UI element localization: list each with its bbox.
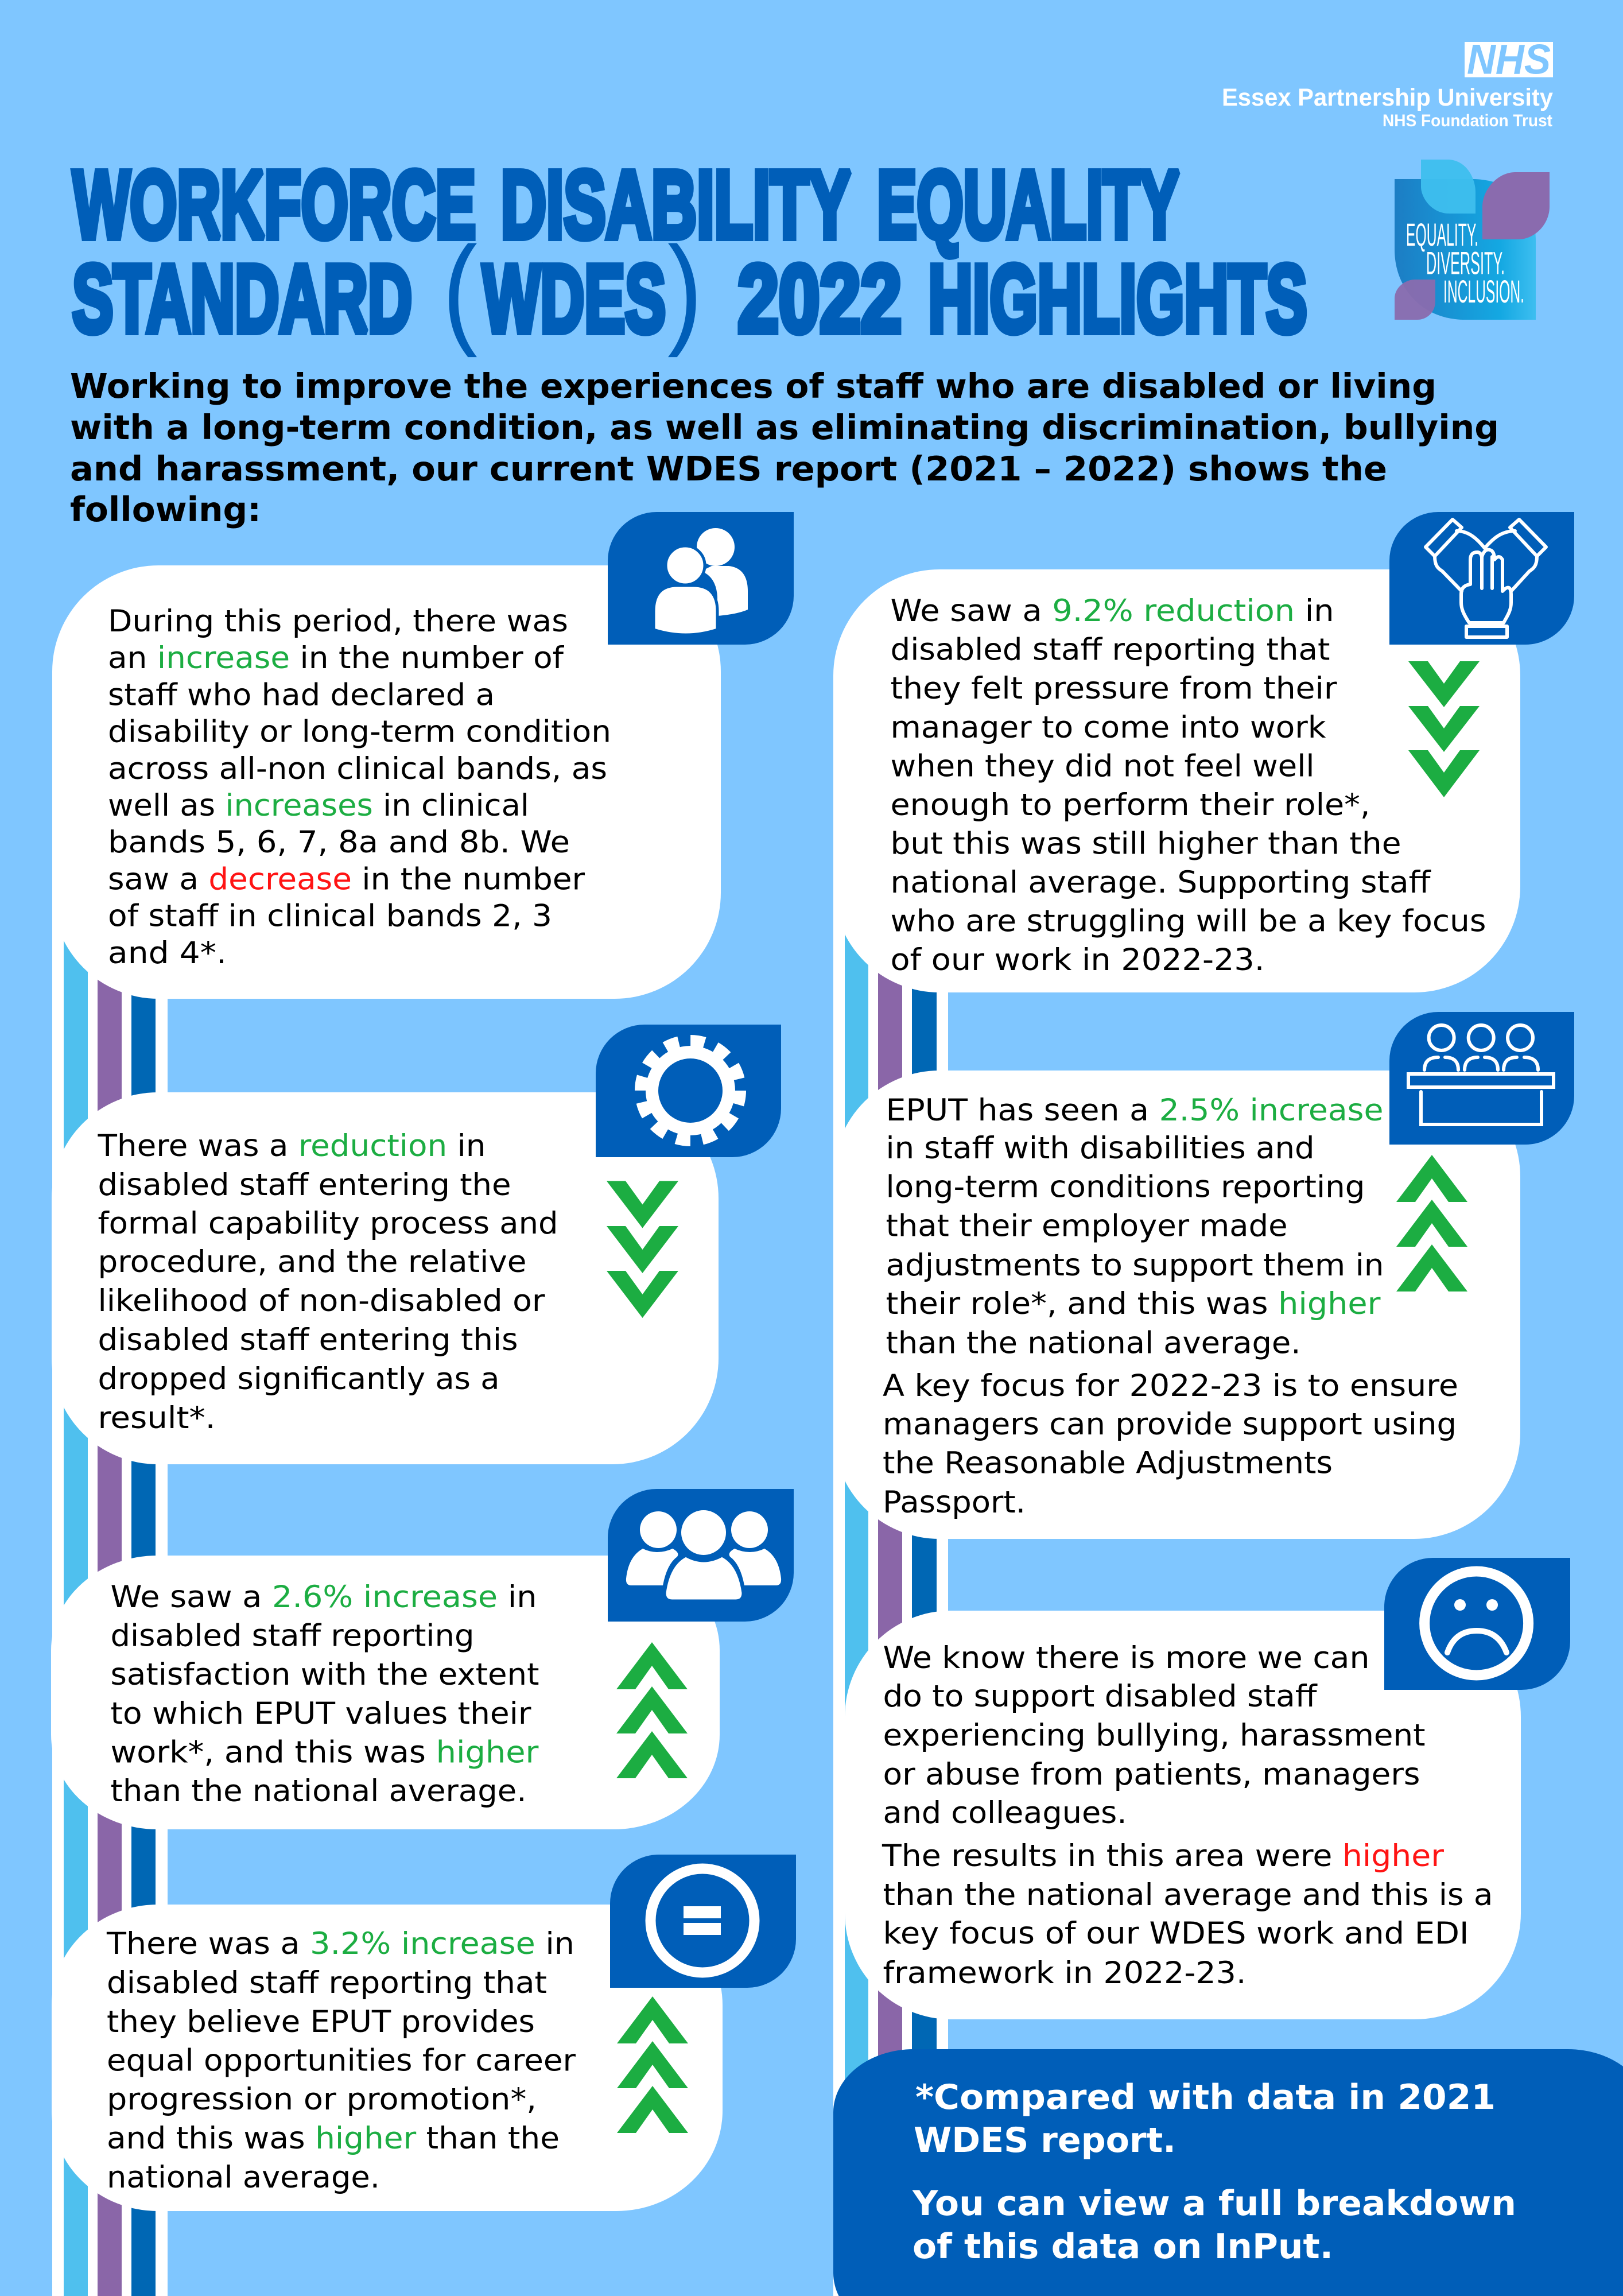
text: bullying and harassment: The results in this area were higher: [882, 1839, 1444, 1874]
text: valued work: work*, and this was higher: [110, 1735, 539, 1770]
text: equal opportunities: national average.: [107, 2160, 380, 2195]
text: equal opportunities: they believe EPUT provides: [107, 2004, 535, 2039]
text: manager pressure: they felt pressure from their: [891, 671, 1337, 706]
title: 2022: [738, 246, 902, 352]
text: footnote: of this data on InPut.: [913, 2227, 1333, 2267]
text: capability process: procedure, and the relative: [98, 1244, 527, 1279]
text: manager pressure: enough to perform their role*,: [891, 788, 1370, 823]
arrows: up: [1396, 1155, 1467, 1292]
text: footnote: You can view a full breakdown: [912, 2183, 1516, 2224]
text: declared disability: across all-non clinical bands, as: [108, 751, 607, 786]
text: bullying and harassment: do to support disabled staff: [883, 1679, 1318, 1714]
text: reasonable adjustments: the Reasonable Adjustments: [883, 1445, 1333, 1481]
panel: footnote: [833, 2049, 1623, 2296]
text: reasonable adjustments: that their employer made: [886, 1209, 1288, 1243]
title: STANDARD: [72, 246, 412, 352]
text: reasonable adjustments: their role*, and this was higher: [886, 1286, 1381, 1321]
NHS trust logo: NHS: [1467, 37, 1551, 83]
text: valued work: disabled staff reporting: [110, 1619, 474, 1653]
text: bullying and harassment: key focus of our WDES work and EDI: [883, 1916, 1469, 1951]
arrows: down: [607, 1181, 678, 1318]
text: equal opportunities: and this was higher than the: [107, 2121, 560, 2156]
text: manager pressure: manager to come into work: [891, 710, 1326, 745]
text: bullying and harassment: and colleagues.: [883, 1795, 1127, 1830]
NHS trust logo: NHS Foundation Trust: [1383, 111, 1552, 130]
text: capability process: result*.: [98, 1401, 216, 1436]
text: declared disability: well as increases in clinical: [108, 788, 529, 823]
text: bullying and harassment: framework in 2022-23.: [883, 1956, 1247, 1991]
text: equal opportunities: [106, 1926, 576, 2195]
text: footnote: *Compared with data in 2021: [915, 2077, 1496, 2117]
text: reasonable adjustments: A key focus for 2022-23 is to ensure: [883, 1368, 1458, 1403]
text: declared disability: saw a decrease in the number: [108, 862, 585, 897]
text: capability process: [97, 1128, 558, 1436]
text: declared disability: an increase in the number of: [108, 641, 565, 676]
intro text: Working to improve the experiences of staff who are disabled or living: [70, 366, 1436, 406]
panel: capability process: [52, 1025, 781, 1464]
title: ): [667, 222, 702, 358]
text: valued work: We saw a 2.6% increase in: [110, 1580, 537, 1615]
title: DISABILITY: [500, 152, 851, 258]
left column coloured stripes: [52, 746, 168, 2296]
text: capability process: disabled staff entering this: [98, 1322, 518, 1358]
text: reasonable adjustments: [883, 1093, 1458, 1520]
arrows: up: [617, 1996, 688, 2133]
icon: three people: [608, 1489, 794, 1622]
text: manager pressure: who are struggling will be a key focus: [891, 903, 1486, 939]
text: declared disability: bands 5, 6, 7, 8a and 8b. We: [108, 825, 570, 860]
text: reasonable adjustments: Passport.: [883, 1485, 1026, 1520]
text: valued work: than the national average.: [110, 1774, 527, 1809]
NHS trust logo: [1222, 37, 1553, 130]
text: reasonable adjustments: adjustments to support them in: [886, 1248, 1384, 1283]
text: equal opportunities: There was a 3.2% increase in: [106, 1926, 574, 1961]
panel: equal opportunities: [52, 1855, 796, 2211]
text: reasonable adjustments: than the national average.: [886, 1326, 1300, 1360]
title: (: [442, 222, 477, 358]
intro text: with a long-term condition, as well as eliminating discrimination, bullying: [70, 408, 1499, 447]
text: declared disability: and 4*.: [108, 936, 227, 971]
title: [72, 152, 1307, 358]
icon: joined hands: [1389, 512, 1574, 645]
panel: reasonable adjustments: [833, 1012, 1574, 1539]
intro text: and harassment, our current WDES report (2021 – 2022) shows the: [70, 449, 1387, 488]
intro text: [70, 366, 1499, 529]
text: valued work: satisfaction with the extent: [110, 1657, 539, 1692]
title: WORKFORCE: [73, 152, 476, 258]
panel: declared disability: [52, 512, 794, 999]
text: declared disability: of staff in clinical bands 2, 3: [108, 899, 552, 933]
text: equal opportunities: disabled staff reporting that: [107, 1965, 547, 2000]
text: manager pressure: when they did not feel well: [891, 748, 1314, 784]
text: valued work: [110, 1580, 539, 1809]
text: manager pressure: national average. Supporting staff: [891, 865, 1431, 900]
text: declared disability: staff who had declared a: [108, 677, 495, 713]
icon: equality diversity inclusion logo: DIVERSITY.: [1426, 245, 1505, 281]
text: declared disability: disability or long-term condition: [108, 714, 611, 750]
icon: equality diversity inclusion logo: EQUALITY.: [1406, 216, 1478, 253]
intro text: following:: [70, 490, 261, 529]
text: reasonable adjustments: EPUT has seen a 2.5% increase: [886, 1093, 1383, 1128]
text: manager pressure: but this was still higher than the: [891, 827, 1401, 861]
text: capability process: disabled staff entering the: [98, 1168, 511, 1203]
text: bullying and harassment: experiencing bullying, harassment: [883, 1718, 1426, 1753]
title: WDES: [483, 246, 666, 352]
right column coloured stripes: [833, 746, 948, 2296]
text: capability process: dropped significantly as a: [98, 1362, 499, 1397]
text: footnote: [912, 2077, 1516, 2267]
arrows: up: [616, 1642, 688, 1778]
text: footnote: WDES report.: [914, 2120, 1176, 2161]
text: declared disability: During this period, there was: [108, 604, 568, 639]
text: bullying and harassment: than the national average and this is a: [883, 1878, 1493, 1913]
text: manager pressure: [891, 594, 1486, 978]
text: reasonable adjustments: long-term conditions reporting: [886, 1170, 1365, 1204]
icon: sad face: [1384, 1558, 1570, 1690]
text: reasonable adjustments: managers can provide support using: [883, 1407, 1457, 1442]
text: capability process: There was a reduction in: [97, 1128, 486, 1163]
text: equal opportunities: progression or promotion*,: [107, 2082, 537, 2117]
panel: bullying and harassment: [845, 1558, 1570, 2019]
panel: manager pressure: [833, 512, 1574, 992]
text: bullying and harassment: We know there is more we can: [883, 1640, 1369, 1676]
icon: two people: [608, 512, 794, 645]
text: capability process: likelihood of non-disabled or: [98, 1283, 545, 1318]
text: valued work: to which EPUT values their: [110, 1696, 531, 1731]
title: HIGHLIGHTS: [929, 246, 1307, 352]
text: reasonable adjustments: in staff with disabilities and: [886, 1131, 1314, 1166]
arrows: down: [1408, 661, 1480, 797]
icon: people at a desk: [1389, 1012, 1574, 1145]
text: bullying and harassment: [882, 1640, 1493, 1991]
icon: equality diversity inclusion logo: INCLUSION.: [1443, 273, 1524, 309]
text: equal opportunities: equal opportunities for career: [107, 2043, 576, 2078]
text: bullying and harassment: or abuse from patients, managers: [883, 1757, 1420, 1792]
text: capability process: formal capability process and: [98, 1206, 558, 1241]
panel: valued work: [51, 1489, 794, 1829]
icon: equals sign in circle: [610, 1855, 796, 1988]
icon: gear: [596, 1025, 781, 1157]
text: manager pressure: of our work in 2022-23.: [891, 943, 1265, 978]
text: manager pressure: We saw a 9.2% reduction in: [891, 594, 1334, 629]
title: EQUALITY: [877, 152, 1179, 258]
NHS trust logo: Essex Partnership University: [1222, 84, 1553, 111]
text: declared disability: [108, 604, 611, 971]
icon: equality diversity inclusion logo: [1395, 160, 1550, 320]
text: manager pressure: disabled staff reporting that: [891, 633, 1330, 667]
